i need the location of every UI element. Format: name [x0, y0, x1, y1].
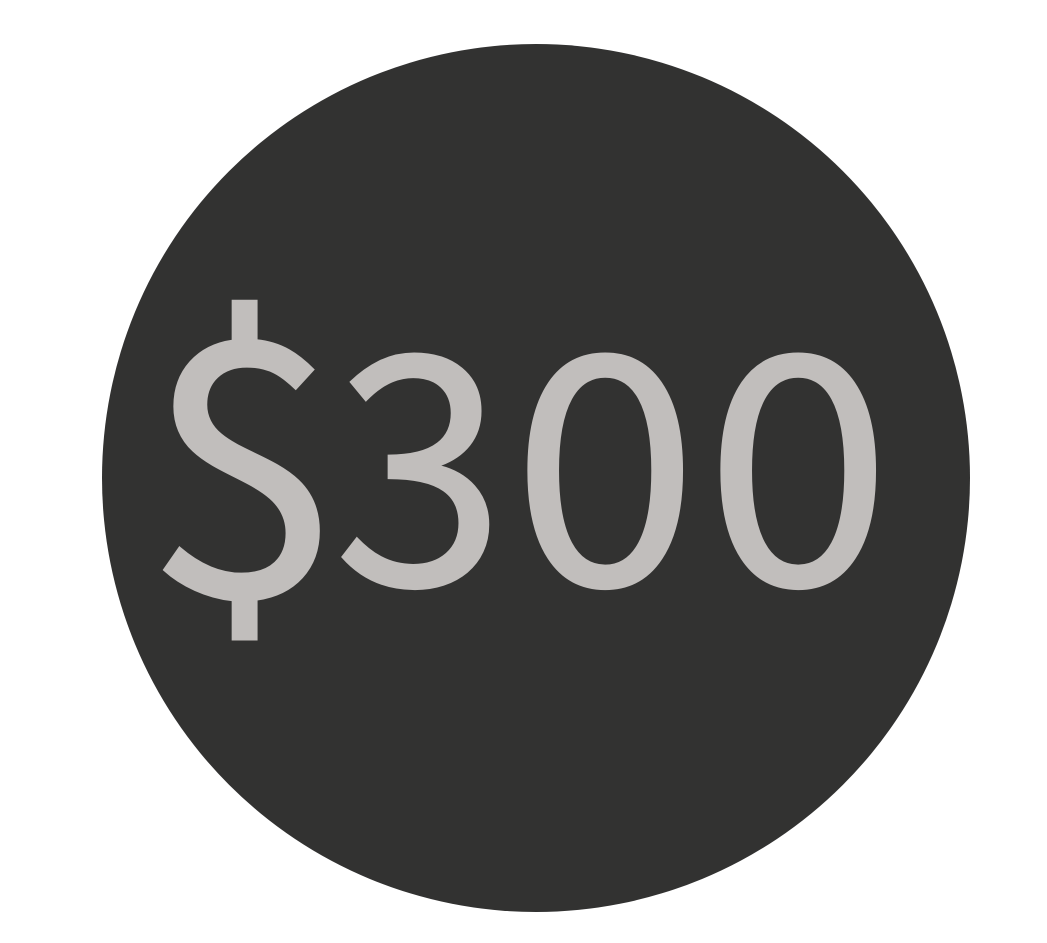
dark circle — [102, 44, 970, 912]
price label: 0 — [512, 217, 698, 677]
price label: $ — [143, 187, 343, 698]
price label: 0 — [705, 217, 891, 677]
price label — [143, 187, 891, 698]
price label: 3 — [333, 215, 506, 677]
